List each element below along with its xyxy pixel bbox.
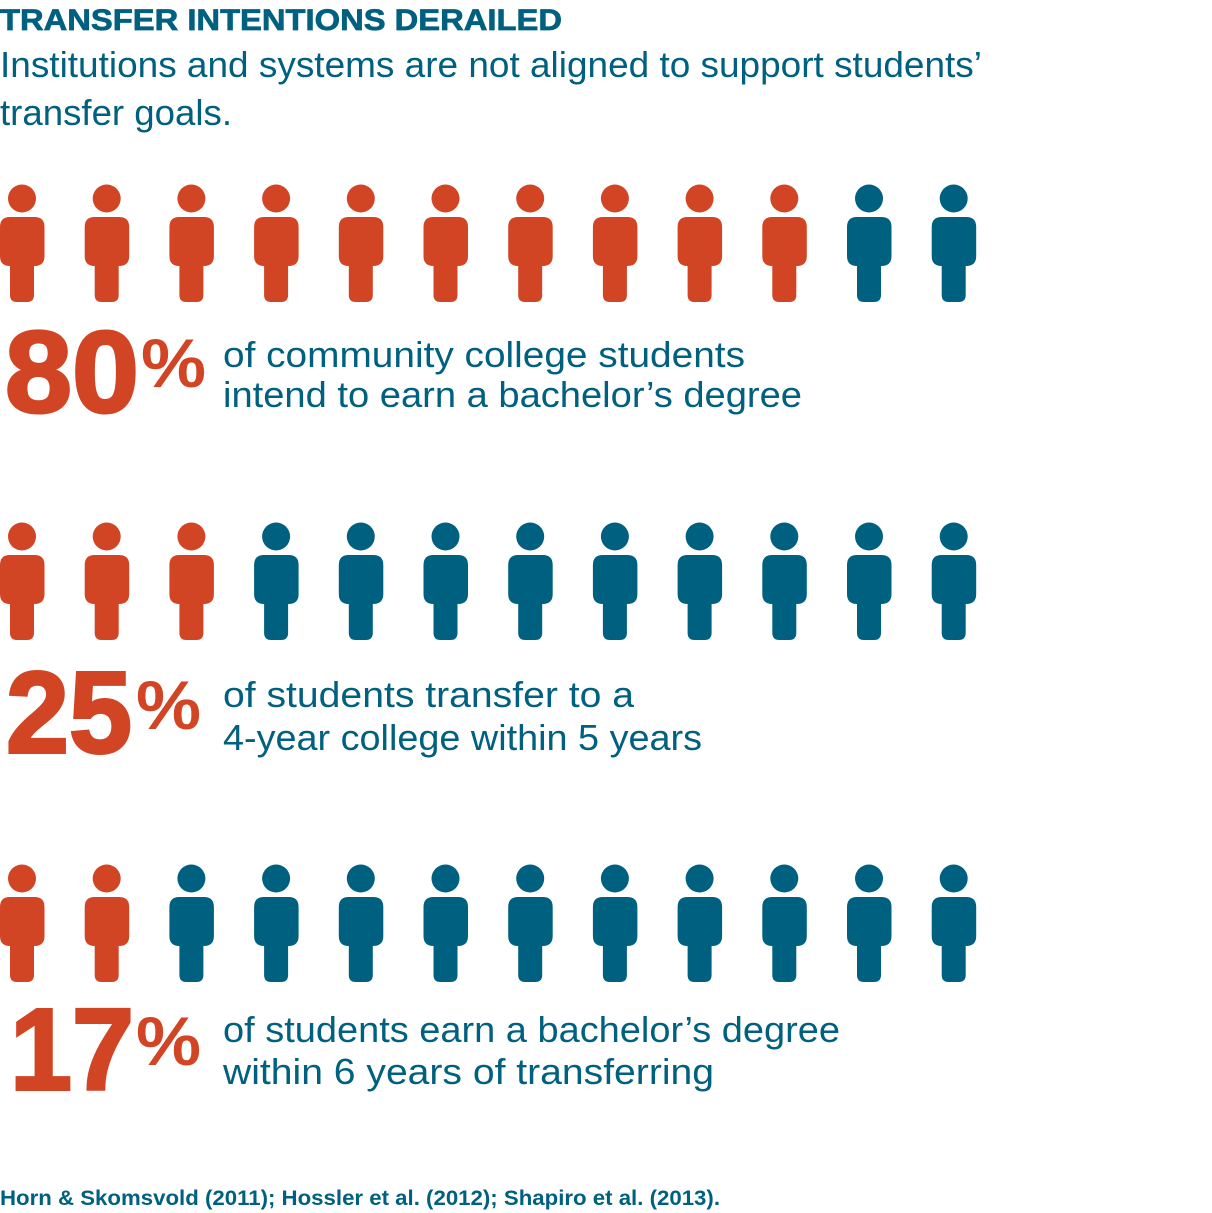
description: 25% [223,674,702,758]
title: TRANSFER INTENTIONS DERAILED [0,4,562,37]
stat: 17%: 17 [10,984,134,1114]
stat: 80% [5,307,206,437]
stat: 25%: 25 [6,648,132,778]
pictogram row: 17% [0,864,976,982]
description: 17%: within 6 years of transferring [222,1051,714,1092]
description: 25%: of students transfer to a [223,674,635,715]
description: 80%: intend to earn a bachelor’s degree [223,374,802,415]
stat: 17%: % [136,1003,201,1080]
pictogram row: 25% [0,522,976,640]
pictogram row: 80% [0,184,976,302]
description: 80%: of community college students [223,334,745,375]
subtitle: transfer goals. [0,92,232,133]
description: 80% [223,334,802,415]
description: 25%: 4-year college within 5 years [223,717,702,758]
stat: 80%: % [141,325,206,402]
stat: 25% [6,648,201,778]
description: 17% [222,1009,840,1092]
stat: 17% [10,984,201,1114]
subtitle: Institutions and systems are not aligned to support students’ [0,44,982,85]
description: 17%: of students earn a bachelor’s degree [223,1009,840,1050]
stat: 25%: % [136,667,201,744]
stat: 80%: 80 [5,307,139,437]
source citation: Horn & Skomsvold (2011); Hossler et al. (2012); Shapiro et al. (2013). [0,1187,720,1210]
subtitle [0,44,982,133]
